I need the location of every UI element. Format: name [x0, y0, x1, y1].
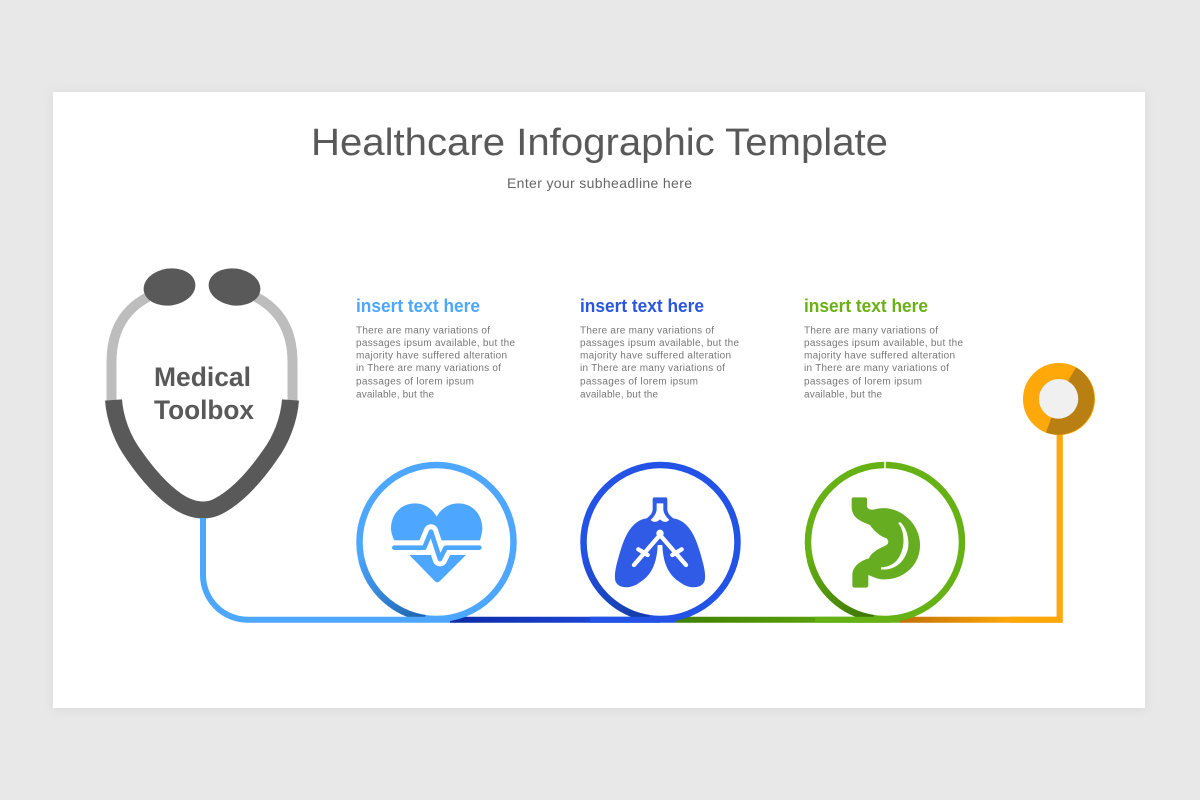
step 2 text: insert text here: There are many variations of [580, 326, 714, 336]
step 1 text: insert text here: There are many variations of [356, 326, 490, 336]
dark chest tube [114, 400, 290, 510]
left ear tip [141, 265, 198, 309]
connector start: blue tube from stethoscope [203, 518, 450, 620]
step 3 text: insert text here: majority have suffered alteration [804, 350, 955, 362]
step 3 text: insert text here: in There are many variations of [804, 363, 949, 374]
step 3 text: insert text here: insert text here [804, 296, 928, 316]
step 1 text: insert text here: majority have suffered alteration [356, 350, 507, 362]
step 3 text: insert text here: There are many variations of [804, 326, 938, 336]
end marker: orange donut [1031, 371, 1087, 427]
step 3 text: insert text here: passages ipsum available, but the [804, 338, 963, 349]
icon: lungs [615, 497, 705, 587]
label: Medical Toolbox: Toolbox [154, 395, 254, 425]
grey ear tubes [112, 297, 292, 402]
connector overlays on ring bases [590, 617, 900, 623]
step 2 text: insert text here: passages ipsum available, but the [580, 338, 739, 349]
step 1 text: insert text here [356, 296, 515, 400]
step 2 text: insert text here: in There are many variations of [580, 363, 725, 374]
step 2 text: insert text here: insert text here [580, 296, 704, 316]
label: Medical Toolbox: Medical [154, 362, 251, 392]
step 2 text: insert text here: passages of lorem ipsum [580, 376, 698, 388]
step 1 text: insert text here: passages ipsum available, but the [356, 338, 515, 349]
title: Healthcare Infographic Template [311, 122, 888, 164]
subtitle: Enter your subheadline here [507, 175, 692, 191]
step 2 text: insert text here [580, 296, 739, 400]
icon: heart with pulse [385, 503, 488, 582]
step 3 text: insert text here: passages of lorem ipsum [804, 376, 922, 388]
step 2 text: insert text here: available, but the [580, 390, 658, 400]
step 2 text: insert text here: majority have suffered alteration [580, 350, 731, 362]
icon: stomach [852, 497, 920, 588]
step 2 ring with lungs icon [584, 465, 738, 619]
step 3 ring with stomach icon [808, 461, 962, 619]
step 3 text: insert text here: available, but the [804, 390, 882, 400]
step 1 ring with heart icon [360, 465, 514, 619]
label: Medical Toolbox [154, 362, 254, 425]
panel: white slide card [53, 92, 1145, 708]
step 1 text: insert text here: insert text here [356, 296, 480, 316]
right ear tip [206, 265, 263, 309]
step 1 text: insert text here: available, but the [356, 390, 434, 400]
connector line: blue, navy, green and orange tube [450, 432, 1060, 620]
stethoscope with label [112, 265, 292, 510]
step 1 text: insert text here: passages of lorem ipsum [356, 376, 474, 388]
step 3 text: insert text here [804, 296, 963, 400]
step 1 text: insert text here: in There are many variations of [356, 363, 501, 374]
